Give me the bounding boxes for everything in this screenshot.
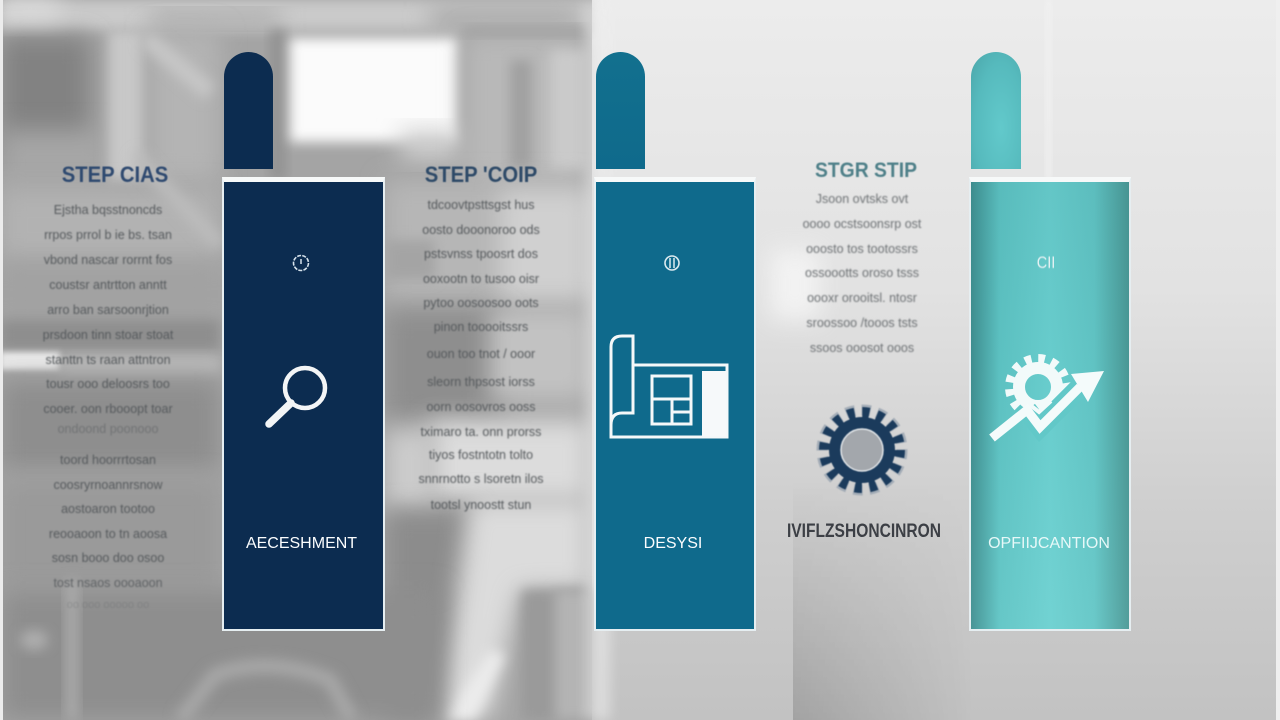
left photo area [0, 0, 610, 720]
heading: step 1: STEP CIAS [62, 162, 168, 187]
body text: step 2: oorn oosovros ooss [426, 400, 536, 414]
icon: magnifying glass [265, 366, 328, 428]
body text: step 1: prsdoon tinn stoar stoat [43, 328, 173, 342]
step 2 tab [596, 52, 645, 169]
lower middle [385, 510, 475, 720]
body text: step 1: tousr ooo deloosrs too [46, 377, 170, 391]
panel: step 1 text [42, 162, 174, 611]
icon: step 1 small glyph [292, 254, 310, 272]
body text: step 1: vbond nascar rorrnt fos [44, 253, 172, 267]
body text: step 1: rrpos prrol b ie bs. tsan [44, 228, 172, 242]
step 1 tab [224, 52, 273, 169]
body text: step 3: oooxr orooitsl. ntosr [807, 291, 917, 305]
panel: step 1 card [222, 177, 385, 631]
body text: step 2: tootsl ynoostt stun [431, 498, 531, 512]
label: step 1: AECESHMENT [246, 535, 357, 552]
body text: step 1: reooaoon to tn aoosa [49, 527, 167, 541]
body text: step 1: oo ooo ooooo oo [67, 599, 149, 611]
body text: step 2: tiyos fostntotn tolto [429, 448, 533, 462]
body text: step 2: pstsvnss tpoosrt dos [424, 247, 538, 261]
panel: step 2 card [594, 177, 756, 631]
icon: step 2 small glyph [664, 255, 680, 271]
left column body [0, 190, 220, 260]
body text: step 1: toord hoorrrtosan [60, 453, 156, 467]
body text: step 1 [42, 203, 174, 611]
bottom [0, 590, 440, 720]
dark zone around first tab [270, 30, 286, 180]
body text: step 1: sosn booo doo osoo [52, 551, 164, 565]
body text: step 2: ooxootn to tusoo oisr [423, 272, 539, 286]
body text: step 3 [802, 192, 922, 355]
body text: step 1: aostoaron tootoo [61, 502, 155, 516]
step 3 tab [971, 52, 1021, 169]
body text: step 3: ooosto tos tootossrs [806, 242, 918, 256]
top strip [0, 0, 590, 30]
body text: step 2: tdcoovtpsttsgst hus [427, 198, 534, 212]
panel: step 2 text [418, 162, 544, 512]
body text: step 1: coustsr antrtton anntt [49, 278, 167, 292]
icon: blueprint [610, 334, 728, 438]
body text: step 3: ssoos ooosot ooos [810, 341, 914, 355]
panel: step 3 text [787, 159, 941, 542]
body text: step 1: tost nsaos oooaoon [53, 576, 163, 590]
heading: step 3: STGR STIP [815, 159, 917, 182]
icon: gear with rising arrow [989, 354, 1104, 442]
body text: step 2: pinon tooooitssrs [434, 320, 528, 334]
body text: step 3: ossoootts oroso tsss [805, 266, 919, 280]
body text: step 3: Jsoon ovtsks ovt [816, 192, 908, 206]
label: step 2: DESYSI [644, 535, 702, 552]
body text: step 1: cooer. oon rbooopt toar [43, 402, 173, 416]
right columns [464, 34, 586, 184]
middle column [385, 180, 590, 300]
right edge of photo [586, 0, 610, 720]
heading: step 2: STEP 'COIP [425, 162, 537, 187]
white window [290, 38, 458, 142]
label: step 3: IVIFLZSHONCINRON [787, 521, 941, 542]
body text: step 1: coosryrnoannrsnow [53, 478, 163, 492]
body text: step 2 [418, 198, 544, 512]
body text: step 2: sleorn thpsost iorss [427, 375, 535, 389]
pale column [108, 30, 144, 180]
body text: step 2: snnrnotto s lsoretn ilos [418, 472, 544, 486]
body text: step 2: ouon too tnot / ooor [427, 347, 535, 361]
dark block top-left [0, 36, 90, 166]
body text: step 1: ondoond poonooo [58, 422, 158, 436]
panel: step 4 card [969, 177, 1131, 631]
icon: step 4 small text glyph: CII [1037, 253, 1055, 272]
body text: step 1: Ejstha bqsstnoncds [54, 203, 162, 217]
body text: step 1: arro ban sarsoonrjtion [47, 303, 169, 317]
body text: step 3: oooo ocstsoonsrp ost [803, 217, 921, 231]
label: step 4: OPFIIJCANTION [988, 535, 1110, 552]
body text: step 3: sroossoo /tooos tsts [806, 316, 918, 330]
icon: dark gear [816, 404, 908, 496]
body text: step 2: oosto dooonoroo ods [422, 223, 540, 237]
body text: step 2: pytoo oosoosoo oots [423, 296, 539, 310]
body text: step 2: tximaro ta. onn prorss [421, 425, 541, 439]
body text: step 1: stanttn ts raan attntron [45, 353, 171, 367]
